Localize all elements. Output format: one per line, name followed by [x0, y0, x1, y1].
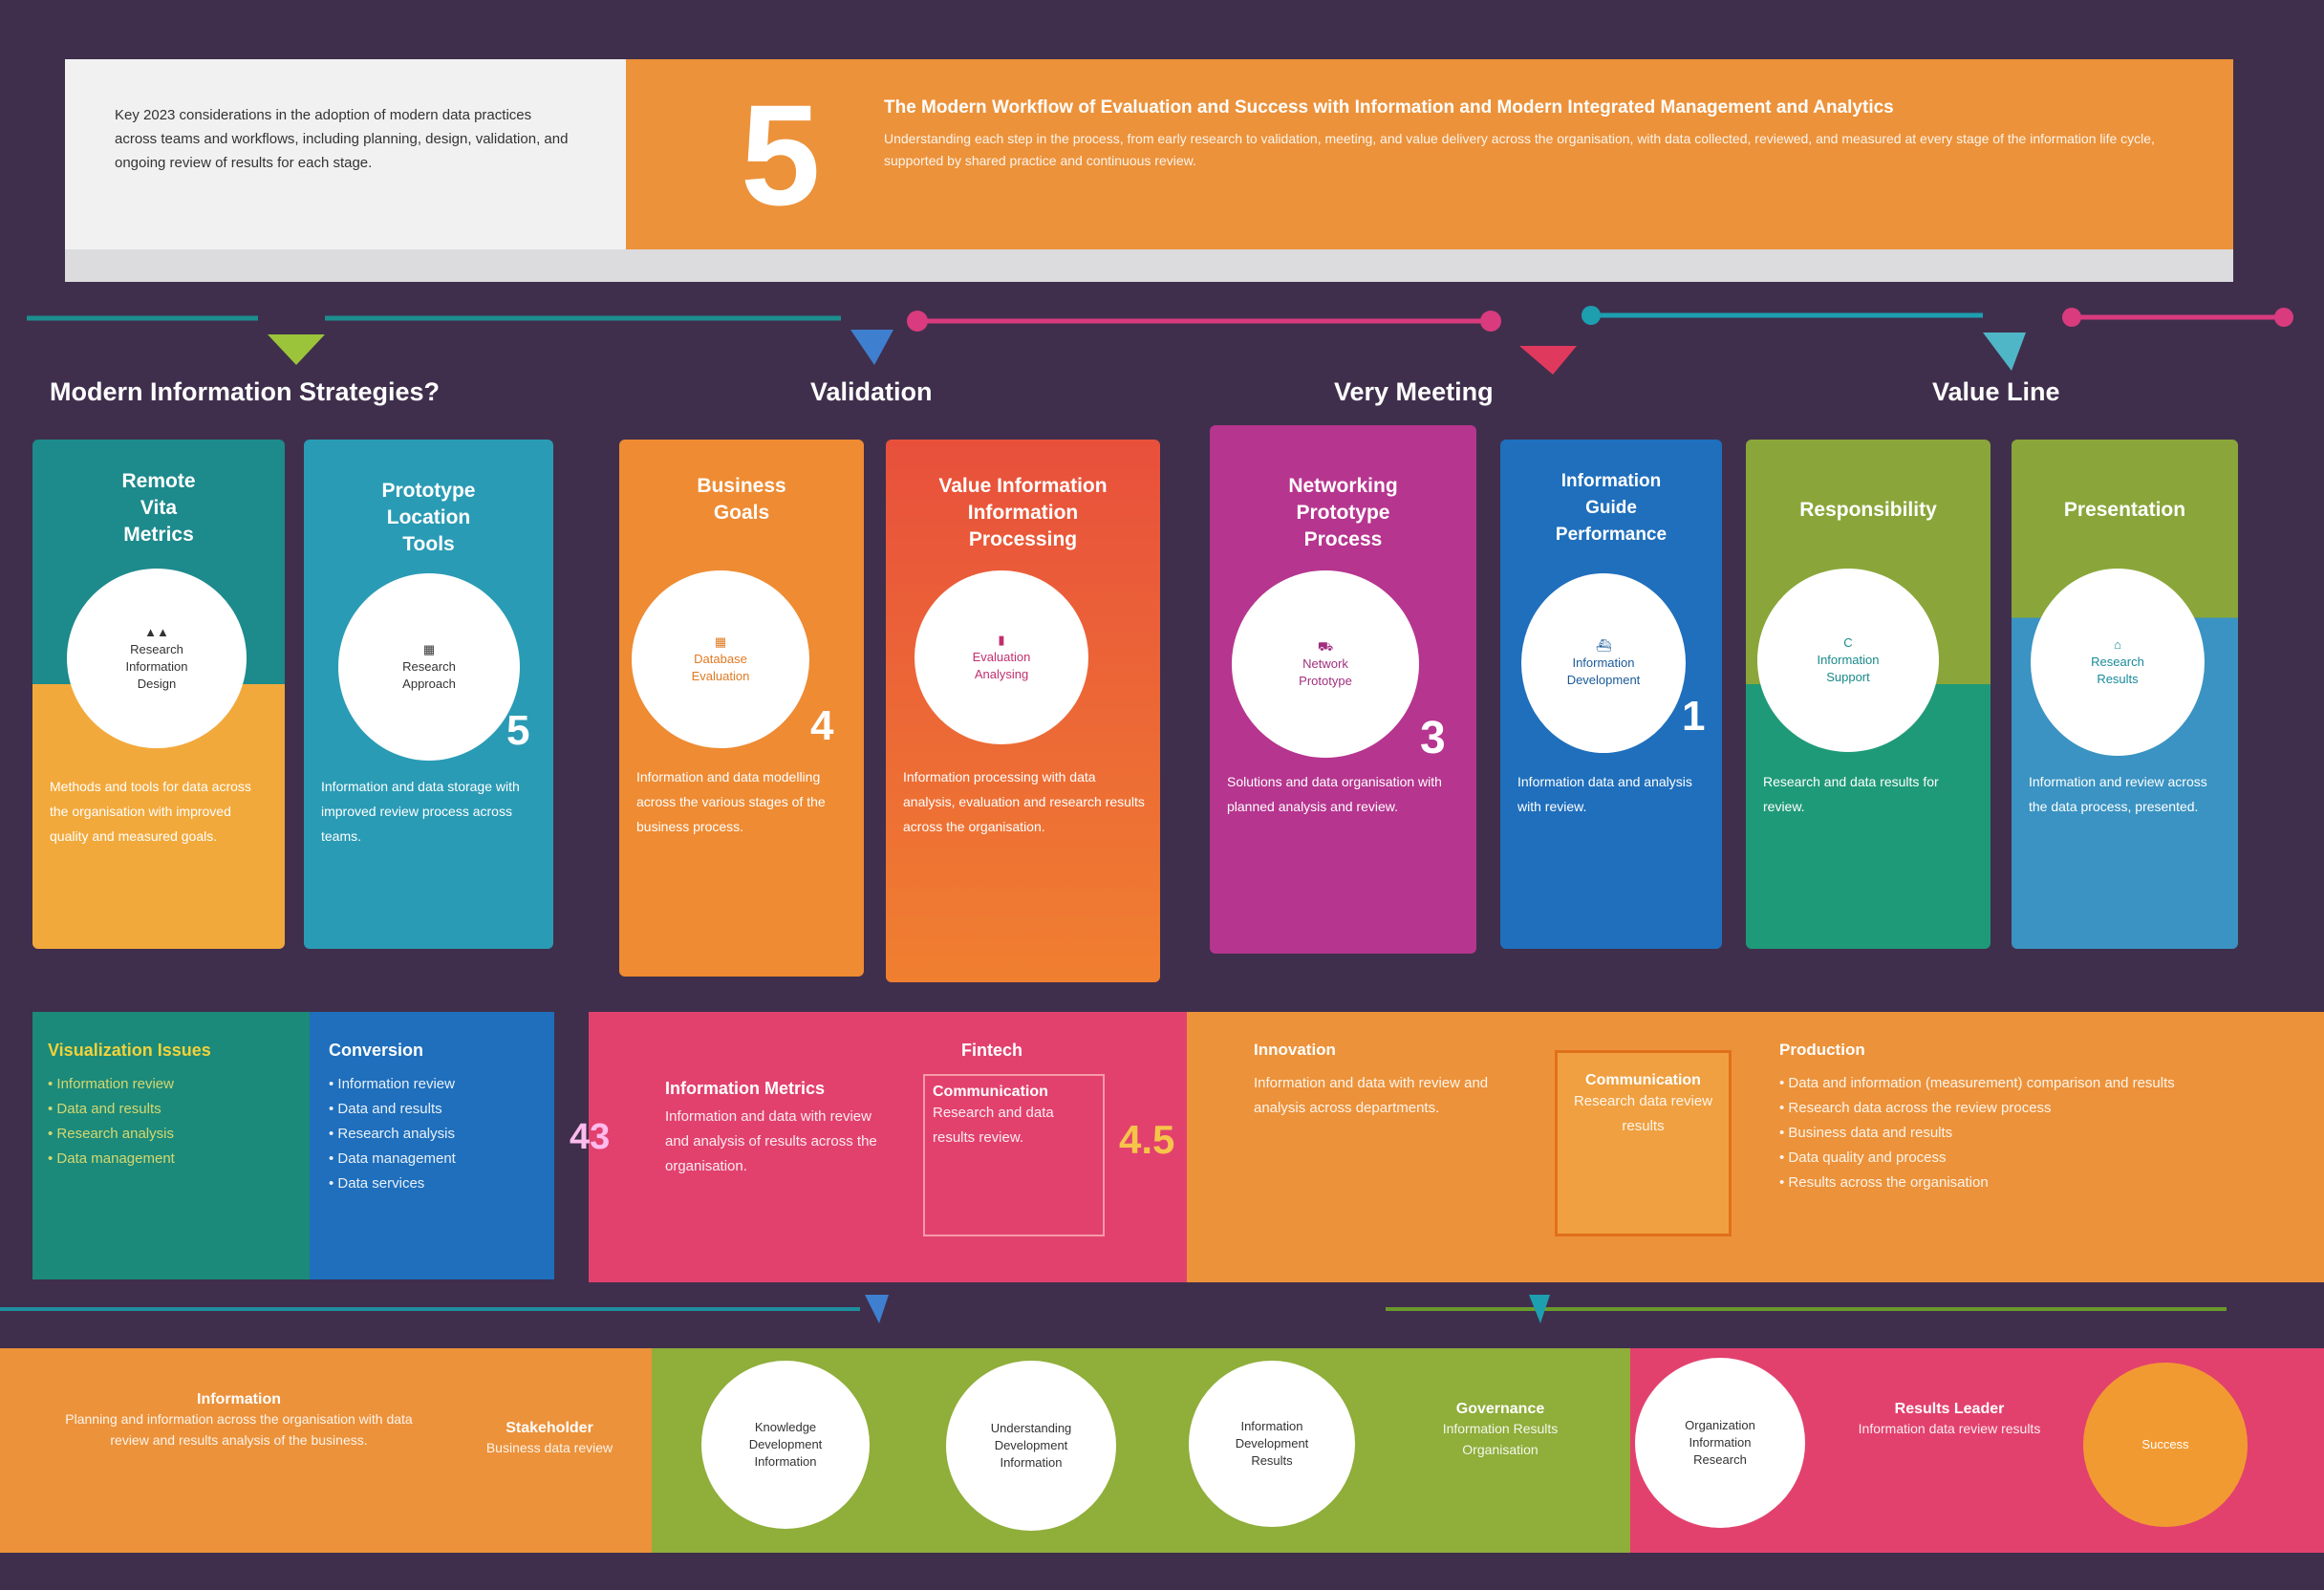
card 6: ⛴: [1596, 638, 1611, 653]
card 5: Prototype: [1296, 502, 1389, 524]
segment orange: Information and data with review and analysis across departments.: [1254, 1075, 1488, 1116]
segment blue: • Data management: [329, 1150, 456, 1167]
card 5: [1210, 425, 1476, 954]
card 2: Information and data storage with improved review process across teams.: [321, 779, 520, 844]
segment pink: Communication: [933, 1084, 1048, 1100]
card 1: Research: [130, 642, 183, 656]
header panel: [65, 59, 2233, 282]
bottom band: Organization: [1685, 1418, 1755, 1432]
segment orange: Communication: [1585, 1072, 1701, 1088]
card 7: [1746, 440, 1990, 949]
segment orange: • Data and information (measurement) comparison and results: [1779, 1075, 2175, 1091]
bottom left text: Planning and information across the organisation with data review and results analysis of the business.: [65, 1411, 413, 1448]
segment blue: • Data and results: [329, 1101, 442, 1117]
card 4: Information: [968, 502, 1078, 524]
card 4: ▮: [998, 633, 1005, 647]
card 3: ▦: [715, 634, 726, 649]
card 5: ⛟: [1318, 639, 1333, 654]
card 7: Responsibility: [1799, 499, 1937, 521]
text: Value Line: [1932, 377, 2060, 406]
segment blue: • Research analysis: [329, 1126, 455, 1142]
bottom circles: Information: [754, 1454, 817, 1469]
segment pink: Research and data results review.: [933, 1105, 1054, 1146]
connector lines: [0, 1295, 2227, 1323]
card 3: Goals: [714, 502, 769, 524]
card 5: Networking: [1288, 475, 1398, 497]
card 3: Database: [694, 652, 747, 666]
header intro text: [65, 59, 626, 249]
card 6: Guide: [1585, 498, 1637, 518]
card 4: Evaluation: [973, 650, 1030, 664]
segment orange: Production: [1779, 1041, 1865, 1059]
card 2: [304, 440, 553, 949]
bottom circles: [701, 1361, 870, 1529]
card 4: Information processing with data analysis, evaluation and research results across the organisation.: [903, 769, 1145, 834]
text: Very Meeting: [1334, 377, 1494, 406]
card 5: Process: [1304, 528, 1382, 550]
segment teal: • Data management: [48, 1150, 175, 1167]
segment blue: [310, 1012, 554, 1279]
bottom band: Results Leader: [1895, 1401, 2004, 1417]
segment orange: Research data review results: [1574, 1093, 1712, 1134]
card 6: 1: [1682, 693, 1705, 740]
card 3: Business: [697, 475, 786, 497]
segment teal: [32, 1012, 310, 1279]
segment orange: Innovation: [1254, 1041, 1336, 1059]
card 7: Support: [1826, 670, 1870, 684]
segment teal: • Research analysis: [48, 1126, 174, 1142]
bottom circles: Knowledge: [755, 1420, 816, 1434]
card 7: C: [1843, 635, 1853, 650]
bottom band: Information: [1689, 1435, 1752, 1450]
card 1: [32, 440, 285, 949]
card 1: Metrics: [123, 524, 194, 546]
header intro text: Key 2023 considerations in the adoption of modern data practices across teams and workflows, including planning, design, validation, and ongoing review of results for each stage.: [115, 107, 568, 171]
bottom band: Development: [995, 1438, 1067, 1452]
card 6: [1500, 440, 1722, 949]
card 5: 3: [1420, 713, 1446, 763]
segment pink: 43: [570, 1117, 610, 1157]
card 6: Information: [1561, 471, 1661, 491]
card 7: Research and data results for review.: [1763, 774, 1939, 814]
bottom band: Information: [1000, 1455, 1063, 1470]
card 3: Information and data modelling across the various stages of the business process.: [636, 769, 826, 834]
card 8: Research: [2091, 655, 2144, 669]
segment blue: • Data services: [329, 1175, 424, 1192]
segment pink: Information Metrics: [665, 1079, 825, 1098]
segment pink: [589, 1012, 1187, 1282]
banner text: Understanding each step in the process, from early research to validation, meeting, and value delivery across the organisation, with data collected, reviewed, and measured at every stage of the information life cycle, supported by shared practice and continuous review.: [884, 131, 2155, 168]
card 2: Approach: [402, 677, 456, 691]
card 8: [2012, 440, 2238, 949]
bottom band: Understanding: [991, 1421, 1071, 1435]
banner text: [884, 97, 2155, 168]
card 5: Prototype: [1299, 674, 1352, 688]
bottom band: Business data review: [486, 1440, 613, 1455]
card 2: ▦: [423, 642, 435, 656]
card 8: Results: [2097, 672, 2139, 686]
card 2: 5: [506, 707, 529, 754]
segment orange: [1187, 1012, 2324, 1282]
segment orange: • Research data across the review process: [1779, 1100, 2052, 1116]
card 3: Evaluation: [692, 669, 749, 683]
middle band: [32, 1012, 2324, 1282]
card 6: Development: [1567, 673, 1640, 687]
card 3: 4: [810, 702, 833, 749]
section labels: Modern Information Strategies?: [50, 377, 440, 406]
segment orange: • Business data and results: [1779, 1125, 1952, 1141]
bottom left text: Information: [197, 1391, 281, 1407]
card 2: Tools: [402, 533, 455, 555]
bottom band: Research: [1693, 1452, 1747, 1467]
card 5: Solutions and data organisation with planned analysis and review.: [1227, 774, 1442, 814]
segment blue: • Information review: [329, 1076, 455, 1092]
big number: 5: [741, 75, 820, 235]
card 6: Information: [1572, 655, 1635, 670]
bottom band: Governance: [1456, 1401, 1544, 1417]
segment pink: Information and data with review and analysis of results across the organisation.: [665, 1108, 877, 1174]
card 5: Network: [1302, 656, 1348, 671]
card 1: Design: [138, 677, 176, 691]
card 8: Information and review across the data process, presented.: [2029, 774, 2207, 814]
bottom band: Results: [1251, 1453, 1293, 1468]
segment blue: Conversion: [329, 1041, 423, 1060]
segment teal: Visualization Issues: [48, 1041, 211, 1060]
card 3: [619, 440, 864, 977]
bottom band: Information: [1240, 1419, 1303, 1433]
card 1: Remote: [121, 470, 196, 492]
bottom band: [0, 1348, 2324, 1553]
card 1: Vita: [140, 497, 177, 519]
card 6: Information data and analysis with review.: [1517, 774, 1692, 814]
banner text: The Modern Workflow of Evaluation and Success with Information and Modern Integrated Management and Analytics: [884, 97, 1894, 118]
bottom band: Stakeholder: [506, 1420, 593, 1436]
bottom band: Information Results Organisation: [1443, 1421, 1558, 1457]
card 1: ▲▲: [144, 625, 169, 639]
card 2: Research: [402, 659, 456, 674]
bottom band: Success: [2141, 1437, 2189, 1451]
card 8: ⌂: [2114, 637, 2121, 652]
bottom band: Development: [1236, 1436, 1308, 1450]
segment teal: • Data and results: [48, 1101, 161, 1117]
text: Validation: [810, 377, 933, 406]
bottom circles: Development: [749, 1437, 822, 1451]
card 4: Processing: [969, 528, 1077, 550]
card 2: Prototype: [381, 480, 476, 502]
card 4: Analysing: [975, 667, 1028, 681]
card 2: Location: [387, 506, 470, 528]
card 1: Methods and tools for data across the organisation with improved quality and measured goals.: [50, 779, 251, 844]
timeline arrows row: [27, 306, 2293, 375]
card 4: [886, 440, 1160, 982]
segment pink: Fintech: [961, 1041, 1022, 1060]
bottom band: Information data review results: [1859, 1421, 2040, 1436]
segment pink: 4.5: [1119, 1117, 1174, 1162]
segment orange: • Data quality and process: [1779, 1150, 1947, 1166]
header orange banner: [626, 59, 2233, 249]
card 8: Presentation: [2064, 499, 2185, 521]
card 4: Value Information: [938, 475, 1108, 497]
card 1: Information: [125, 659, 188, 674]
bottom left text: [65, 1391, 413, 1448]
card 6: Performance: [1556, 525, 1667, 545]
card 7: Information: [1817, 653, 1880, 667]
segment teal: • Information review: [48, 1076, 174, 1092]
segment orange: • Results across the organisation: [1779, 1174, 1989, 1191]
